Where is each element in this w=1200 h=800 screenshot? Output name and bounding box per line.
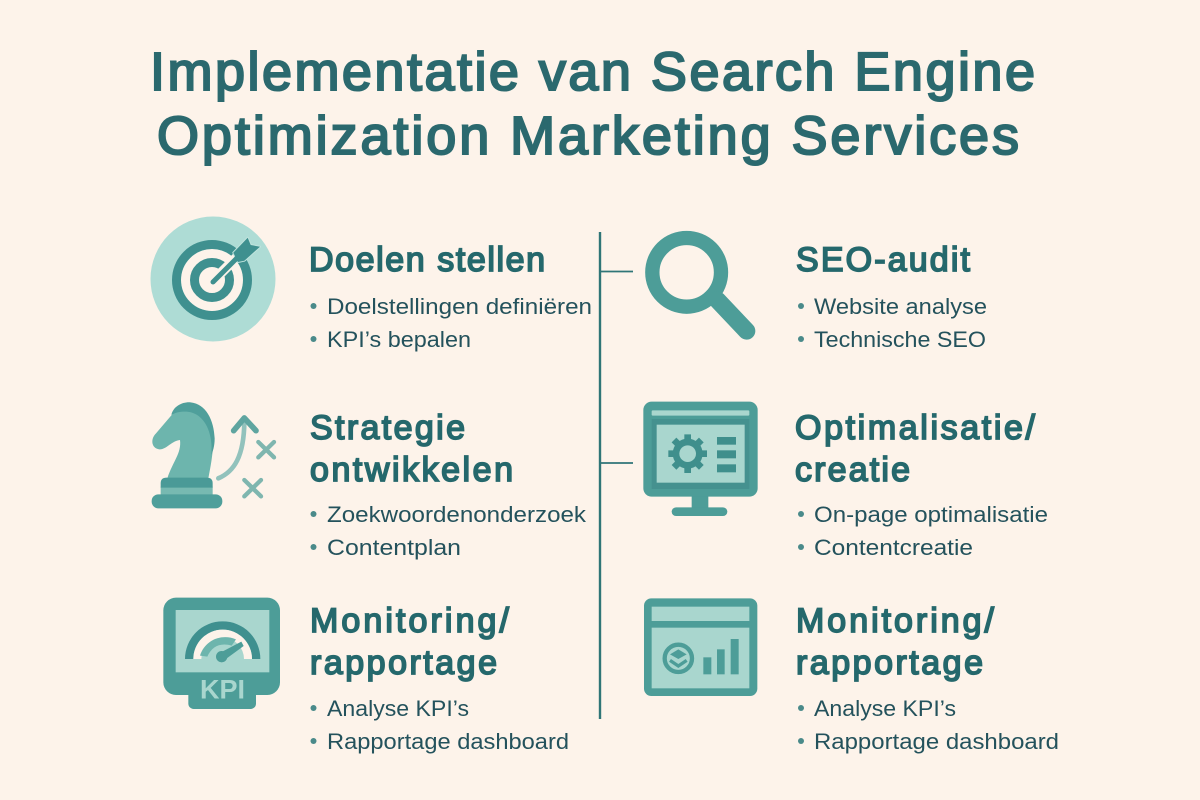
bullet list: doelen stellen: Doelstellingen definiëren [327, 294, 592, 319]
icon: monitor with gear [643, 402, 758, 516]
bullet list: doelen stellen: KPI’s bepalen [327, 327, 471, 352]
bullet list: optimalisatie creatie: On-page optimalisatie [814, 502, 1048, 527]
bullet list: monitoring rapportage: Analyse KPI’s [327, 696, 469, 721]
heading: strategie ontwikkelen: Strategie [310, 409, 465, 447]
panel: monitoring rapportage rechts [644, 598, 1059, 754]
icon: dashboard window [644, 598, 757, 696]
timeline divider [600, 232, 633, 719]
heading: monitoring rapportage [310, 602, 510, 682]
bullet list: strategie ontwikkelen: Contentplan [327, 535, 461, 560]
bullet list: doelen stellen [310, 294, 592, 352]
bullet list: seo-audit: Technische SEO [814, 327, 986, 352]
title: Implementatie van Search Engine [150, 42, 1035, 102]
bullet list: monitoring rapportage: Analyse KPI’s [814, 696, 956, 721]
icon: KPI gauge: KPI [200, 674, 245, 704]
heading: strategie ontwikkelen: ontwikkelen [310, 451, 513, 489]
heading: monitoring rapportage: rapportage [796, 644, 983, 682]
heading: monitoring rapportage: Monitoring/ [310, 602, 510, 640]
panel: monitoring rapportage links [163, 598, 569, 754]
bullet list: optimalisatie creatie: Contentcreatie [814, 535, 973, 560]
panel: doelen stellen [150, 216, 592, 352]
bullet list: strategie ontwikkelen [310, 502, 587, 560]
heading: optimalisatie creatie: Optimalisatie/ [795, 409, 1036, 447]
bullet list: monitoring rapportage: Rapportage dashboard [327, 729, 569, 754]
panel: optimalisatie creatie [643, 402, 1048, 560]
icon: magnifying glass [652, 238, 747, 331]
bullet list: strategie ontwikkelen: Zoekwoordenonderzoek [327, 502, 587, 527]
bullet list: seo-audit [798, 294, 987, 352]
icon: chess knight with arrow [152, 402, 274, 508]
bullet list: seo-audit: Website analyse [814, 294, 987, 319]
title [150, 42, 1035, 166]
icon: target with arrow [150, 216, 276, 342]
bullet list: monitoring rapportage [310, 696, 569, 754]
bullet list: optimalisatie creatie [798, 502, 1048, 560]
heading: monitoring rapportage: rapportage [310, 644, 497, 682]
heading: doelen stellen: Doelen stellen [309, 241, 545, 279]
title: Optimization Marketing Services [157, 106, 1019, 166]
heading: seo-audit: SEO-audit [796, 241, 971, 279]
icon: KPI gauge [163, 598, 280, 709]
bullet list: monitoring rapportage [798, 696, 1059, 754]
heading: monitoring rapportage: Monitoring/ [796, 602, 995, 640]
heading: monitoring rapportage [796, 602, 995, 682]
panel: seo-audit [652, 238, 987, 352]
heading: strategie ontwikkelen [310, 409, 513, 489]
bullet list: monitoring rapportage: Rapportage dashboard [814, 729, 1059, 754]
panel: strategie ontwikkelen [152, 402, 587, 560]
heading: optimalisatie creatie: creatie [795, 451, 910, 489]
heading: optimalisatie creatie [795, 409, 1036, 489]
